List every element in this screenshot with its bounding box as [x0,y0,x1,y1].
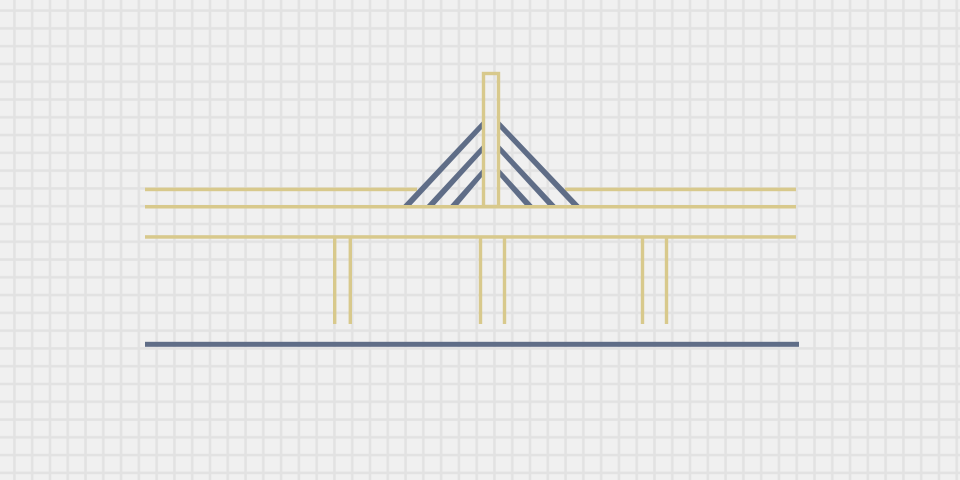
ground / water line [145,342,799,347]
centre pier pair [479,238,506,324]
main deck line [145,205,796,208]
upper deck rail: left segment [145,188,417,191]
lower deck line [145,235,796,239]
stay cables: right side [500,122,580,206]
stay cables: left side [402,122,482,206]
left pier pair [333,238,352,324]
right pier pair [641,238,668,324]
bridge tower [484,74,498,206]
upper deck rail: right segment [565,188,796,191]
